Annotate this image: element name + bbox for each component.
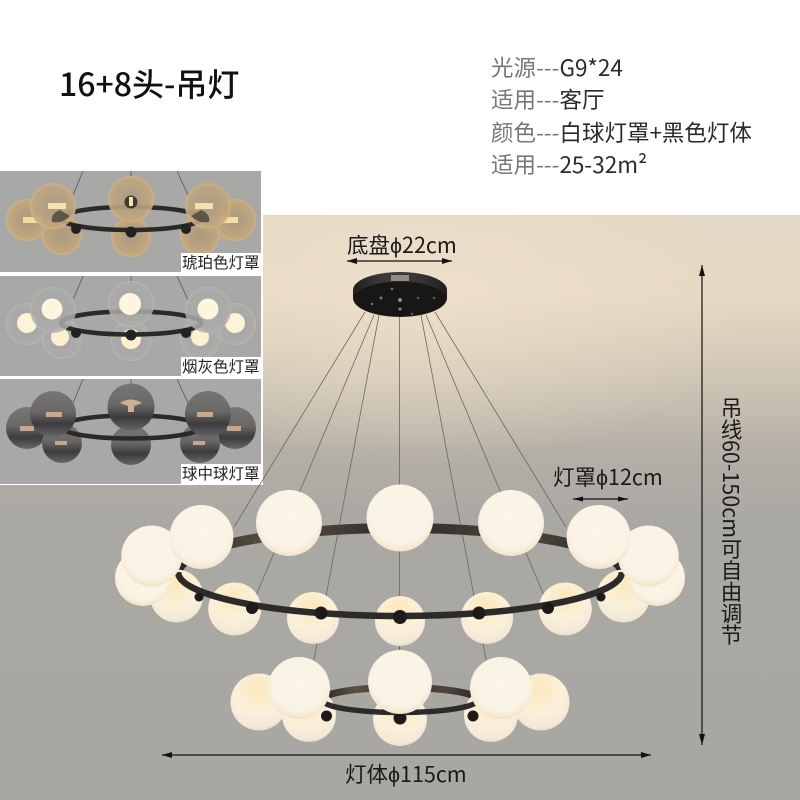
dimension: body diameter: 灯体ϕ115cm — [345, 758, 467, 789]
dimension: canopy diameter: 底盘ϕ22cm — [347, 229, 457, 260]
spec: use: 适用---客厅 — [491, 83, 604, 115]
spec: colour: 颜色---白球灯罩+黑色灯体 — [491, 116, 752, 148]
panel: smoke grey shade option — [0, 276, 261, 377]
photo background: room wall — [0, 215, 800, 800]
dimension: cable length label: 吊线60-150cm可自由调节 — [716, 397, 747, 646]
lower ring: back globes — [268, 650, 532, 719]
specification list — [491, 51, 752, 180]
suspension wires — [234, 312, 566, 660]
chandelier — [115, 272, 685, 746]
panel: amber shade option — [0, 171, 261, 273]
label: ball-in-ball shade: 球中球灯罩 — [182, 462, 260, 484]
upper ring: back globes — [115, 484, 685, 606]
dimension: cable length arrow — [699, 265, 705, 745]
spec: area: 适用---25-32m² — [491, 148, 647, 180]
lower ring: front and side globes — [230, 674, 570, 746]
lower ring: back arc — [322, 688, 478, 700]
lower ring: front arc — [322, 700, 478, 712]
spec: light source: 光源---G9*24 — [491, 51, 623, 83]
title: 16+8头-吊灯 — [59, 60, 239, 106]
dimension: shade diameter: 灯罩ϕ12cm — [553, 461, 663, 492]
dimension: body diameter — [162, 752, 651, 789]
upper ring: front globes — [150, 570, 650, 646]
label: amber shade: 琥珀色灯罩 — [182, 251, 260, 273]
panel: ball-in-ball shade option — [0, 379, 261, 484]
ceiling canopy — [353, 272, 447, 317]
upper ring: sockets — [194, 592, 606, 624]
upper ring: back arc — [178, 528, 622, 572]
lower ring: sockets — [321, 710, 478, 724]
label: smoke grey shade: 烟灰色灯罩 — [182, 355, 260, 377]
upper ring: front arc — [178, 572, 622, 616]
